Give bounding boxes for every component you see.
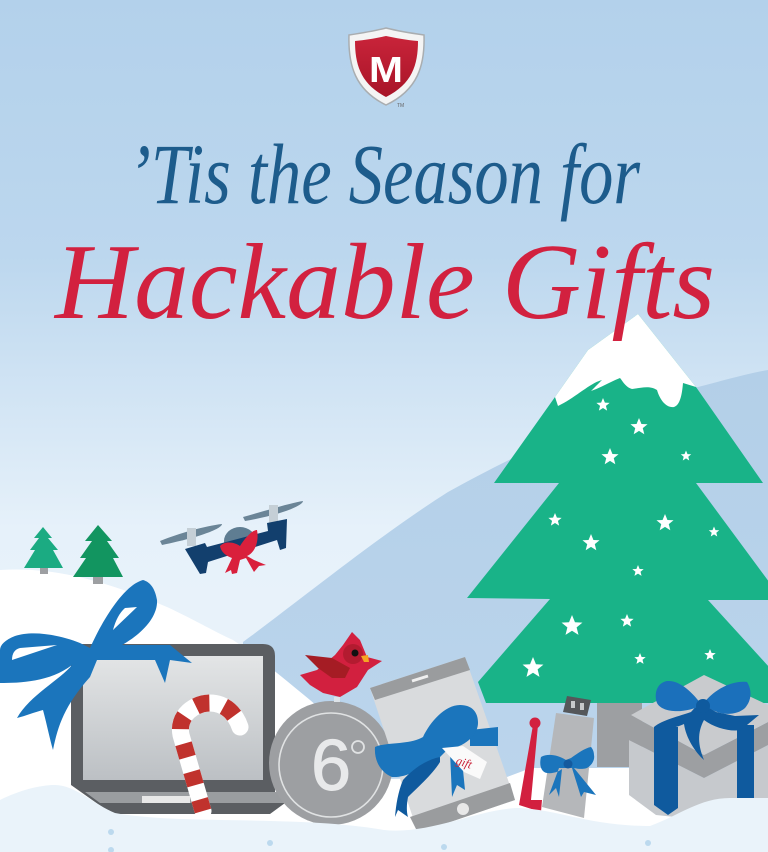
cardinal beak [361,655,369,662]
cardinal body [300,632,382,697]
drone body [185,519,287,574]
drone with red bow [160,501,303,574]
USB body [542,713,594,818]
thermostat [269,701,393,825]
temperature reading: 6 [311,726,351,806]
large blue bow on laptop [0,580,192,750]
thermostat dial [269,701,393,825]
box right face [704,745,768,820]
laptop shell [71,644,285,814]
tablet [370,657,515,833]
tree foliage [467,314,768,703]
red cardinal [300,632,382,702]
front snow drifts [0,785,768,852]
shield inner [355,36,418,97]
bow loops [375,705,478,777]
cardinal wing [305,655,350,678]
laptop [71,644,285,814]
ribbon straps [654,727,678,815]
small pine tree light [24,527,63,574]
bow knot [696,699,710,713]
USB connector [563,696,591,716]
USB drive [519,696,596,818]
small bow tail [450,752,465,797]
shield letter: M [369,49,403,90]
trademark: TM [397,103,404,109]
drone dome [224,527,256,555]
red antenna [519,718,542,812]
laptop keyboard deck [85,792,285,803]
tablet body [370,657,515,833]
candy cane [180,703,240,811]
background blue mountain [243,370,768,852]
drone red ribbon [220,530,266,574]
ribbon strap [470,727,498,746]
laptop trackpad [142,796,190,803]
small pine tree dark [73,525,123,584]
snow cap [555,314,696,407]
title line one: ’Tis the Season for [128,126,640,222]
box lid side [629,715,768,778]
laptop screen [83,656,263,780]
tablet bottom bar [410,783,515,833]
bow loops [656,681,751,714]
box bow [654,681,759,760]
gift box [629,675,768,820]
brand shield logo [349,28,424,109]
box left face [629,740,704,820]
tree stars [523,398,719,677]
tablet top bar [370,657,470,700]
shield outer [349,28,424,105]
white snow ground [300,768,768,852]
snowy hill left [0,569,420,852]
gift tag [442,746,487,779]
tablet blue bow [375,705,498,817]
bow tail dark [395,757,440,817]
cardinal head [343,644,363,664]
cardinal feet [334,697,340,702]
tablet speaker [412,676,428,681]
big Christmas tree [467,314,768,767]
cardinal eye [352,650,358,656]
drone rotors [160,501,303,546]
title line two: Hackable Gifts [53,223,715,342]
box lid top [631,675,768,755]
gift tag text: gift [454,753,475,772]
degree symbol [352,741,364,753]
snow dots [108,829,651,852]
tree trunk [597,700,642,767]
bow lower dark tails [654,702,759,760]
tablet button [457,803,469,815]
USB blue bow [540,747,596,797]
